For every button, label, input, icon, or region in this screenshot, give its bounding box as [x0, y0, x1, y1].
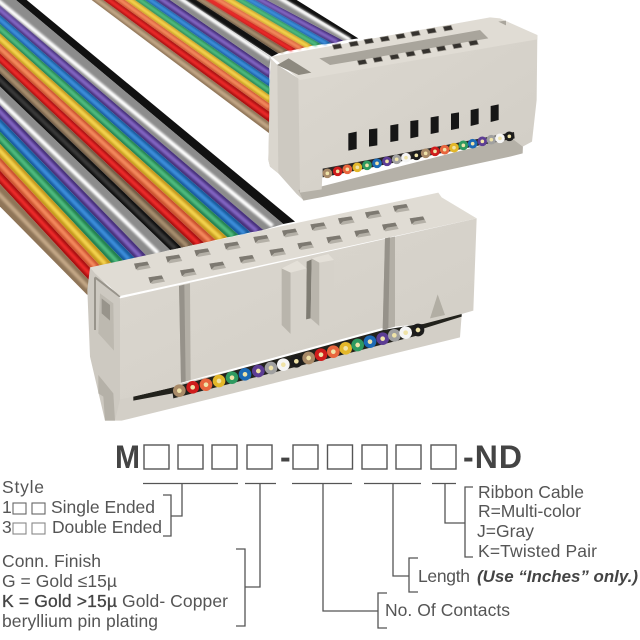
ribbon leader and bracket	[445, 484, 473, 557]
polarising key tabs	[282, 254, 334, 334]
connector slot	[133, 313, 462, 401]
length legend: (Use “Inches” only.)	[477, 567, 638, 586]
connector top face	[90, 193, 477, 296]
ribbon cable legend: R=Multi-color	[478, 501, 581, 521]
length leader and bracket	[393, 484, 418, 592]
part number underlines	[143, 482, 456, 484]
upper connector	[268, 17, 537, 201]
upper ribbon cable	[88, 0, 358, 133]
wire ends	[175, 326, 422, 395]
connector front face	[120, 218, 477, 399]
ribbon cable legend	[477, 482, 597, 561]
connector finish leader and bracket	[236, 484, 260, 626]
style legend: Style	[2, 477, 44, 497]
connector finish legend: K = Gold >15µ	[2, 591, 117, 611]
style legend: 3	[2, 517, 12, 537]
front windows	[348, 104, 499, 151]
connector top face	[272, 17, 537, 80]
connector lower lip	[113, 315, 462, 421]
contacts legend: No. Of Contacts	[385, 600, 510, 620]
style legend: Single Ended	[51, 497, 155, 517]
style legend	[2, 477, 162, 537]
left groove	[179, 283, 191, 383]
ribbon cable legend: J=Gray	[477, 521, 534, 541]
side frame	[95, 277, 120, 330]
connector finish legend: Gold- Copper	[122, 591, 228, 611]
connector left side	[87, 267, 120, 421]
connector finish legend: beryllium pin plating	[2, 611, 158, 631]
length legend	[418, 566, 638, 586]
connector bottom strip	[298, 137, 523, 201]
bottom notch	[98, 375, 115, 421]
length legend: Length	[418, 566, 470, 586]
connector finish legend: Conn. Finish	[2, 551, 101, 571]
style legend: Double Ended	[52, 517, 162, 537]
corner notch	[277, 58, 311, 75]
ribbon cable legend: Ribbon Cable	[478, 482, 584, 502]
lower ribbon cable	[0, 0, 295, 295]
connector finish legend	[2, 551, 228, 631]
contacts leader and bracket	[323, 484, 387, 628]
part number heading	[115, 439, 522, 475]
latch window	[98, 293, 114, 351]
contact holes	[332, 25, 478, 65]
part number heading: M	[115, 439, 140, 475]
part number heading: -	[280, 439, 291, 475]
box placeholders	[144, 445, 456, 469]
cable slot	[319, 30, 488, 65]
ribbon cable legend: K=Twisted Pair	[478, 541, 597, 561]
part number heading: -ND	[463, 439, 522, 475]
contact holes	[134, 204, 426, 284]
pin 1 triangle	[430, 294, 445, 318]
connector finish legend: G = Gold ≤15µ	[2, 571, 117, 591]
lower connector	[87, 193, 477, 421]
wire ends	[323, 132, 515, 177]
style legend: 1	[2, 497, 12, 517]
style leader and bracket	[163, 484, 182, 536]
connector front face	[298, 35, 537, 193]
right groove	[383, 237, 395, 330]
connector left side	[268, 58, 303, 200]
